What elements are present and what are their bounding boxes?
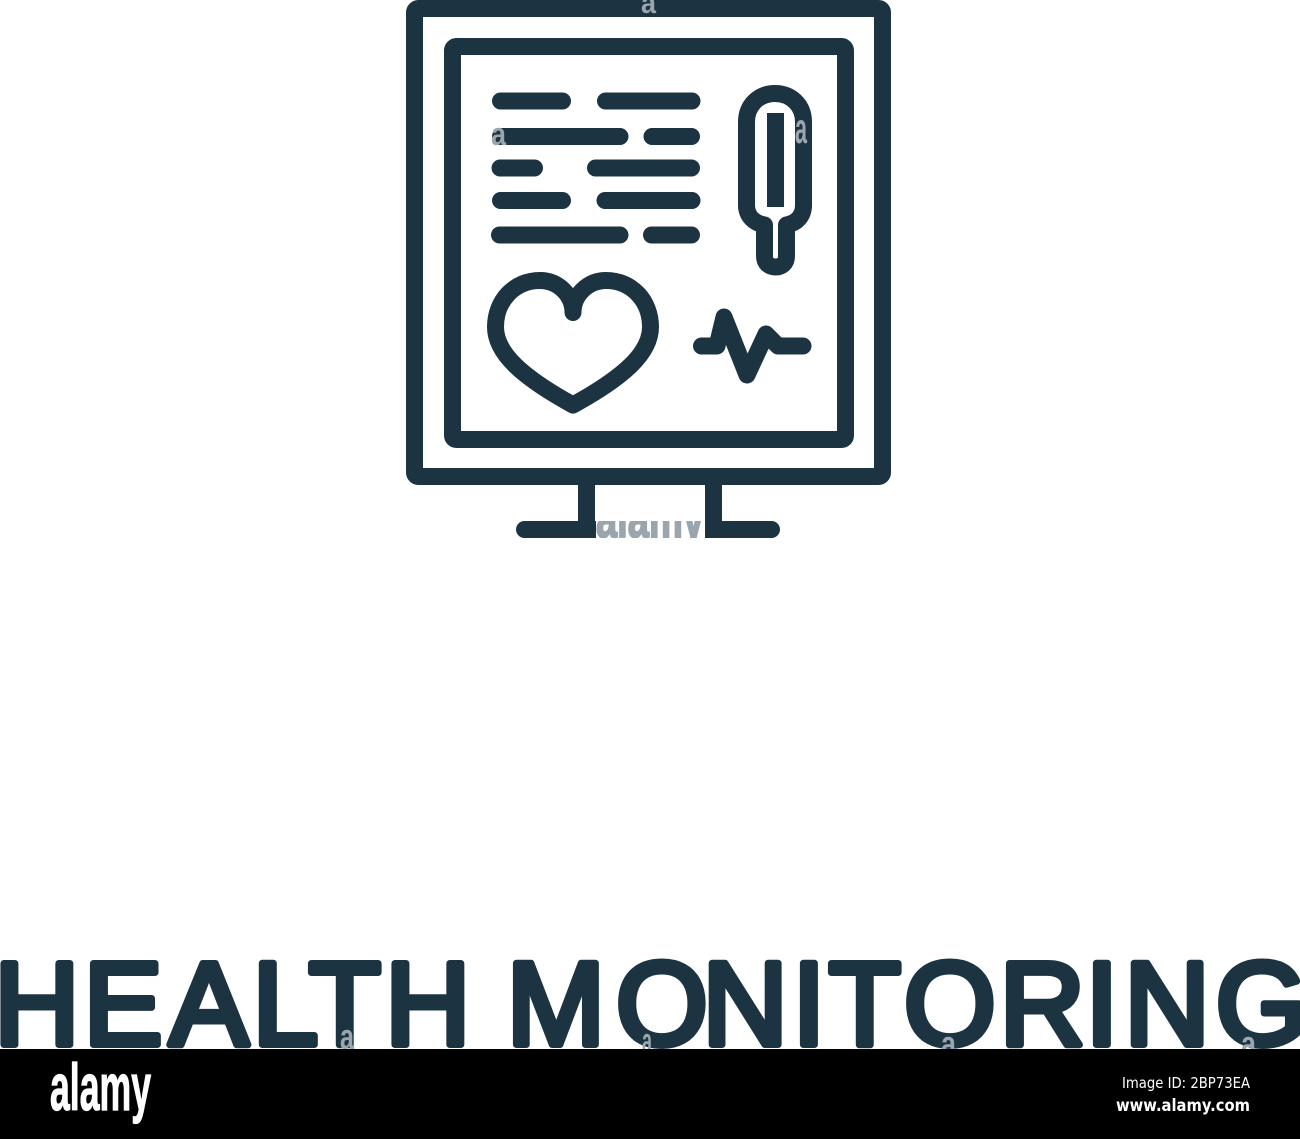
logo: alamy: alamy [50, 1050, 151, 1124]
title watermark letters: a [340, 1016, 355, 1057]
screen frame [452, 46, 846, 440]
icon: heart [496, 280, 650, 405]
text lines on screen [500, 101, 692, 235]
image id: Image ID: 2BP73EA [1122, 1074, 1251, 1092]
icon: pulse line [702, 317, 803, 375]
watermark word on base [596, 521, 705, 538]
title watermark letters: a [941, 1023, 957, 1064]
title: HEALTH MONITORING [0, 938, 1300, 1070]
title watermark letters [340, 1030, 1254, 1049]
monitor outer frame [414, 8, 882, 476]
icon: thermometer [746, 94, 804, 267]
title watermark letters: a [1241, 1023, 1257, 1064]
watermark word on base: alamy [596, 486, 704, 549]
monitor stand [524, 480, 772, 530]
title watermark letters: a [642, 1020, 652, 1061]
watermark letter thermometer: a [795, 105, 808, 153]
title [0, 958, 1300, 1049]
footer bar [0, 1049, 1300, 1139]
icon: health monitor [414, 8, 882, 530]
watermark letter line: a [491, 116, 506, 152]
watermark marks on icon [491, 0, 808, 549]
website: www.alamy.com [1116, 1096, 1250, 1116]
